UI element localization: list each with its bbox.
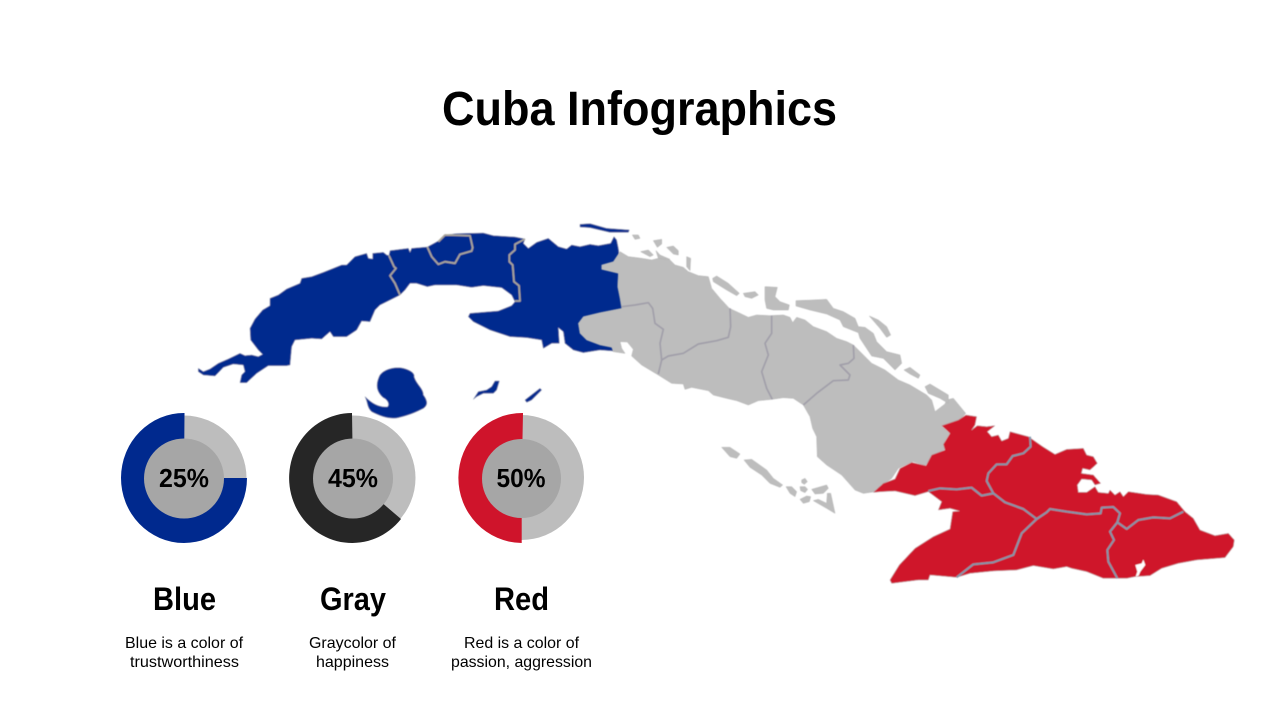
legend item: red: Red bbox=[494, 581, 549, 617]
map region: blue western provinces bbox=[198, 224, 629, 418]
map region: gray central provinces bbox=[578, 235, 966, 513]
title: Cuba Infographics bbox=[442, 83, 837, 136]
donut chart: blue 25% bbox=[121, 413, 247, 543]
legend item: red: passion, aggression bbox=[451, 654, 592, 671]
donut chart: gray 45%: 45% bbox=[328, 463, 378, 493]
map of Cuba bbox=[198, 224, 1234, 583]
donut chart: red 50% bbox=[458, 413, 584, 543]
donut chart: gray 45% bbox=[289, 413, 416, 543]
legend item: red bbox=[451, 581, 592, 671]
legend item: blue: Blue is a color of bbox=[125, 635, 244, 652]
legend item: gray: happiness bbox=[316, 654, 389, 671]
map region: red eastern provinces bbox=[873, 415, 1234, 583]
legend item: blue bbox=[125, 581, 244, 671]
donut chart: red 50%: 50% bbox=[496, 463, 546, 493]
legend item: blue: Blue bbox=[153, 581, 216, 617]
legend item: gray: Gray bbox=[320, 581, 386, 617]
donut chart: blue 25%: 25% bbox=[159, 463, 209, 493]
legend item: gray bbox=[309, 581, 397, 671]
legend item: blue: trustworthiness bbox=[130, 654, 239, 671]
legend item: red: Red is a color of bbox=[464, 635, 580, 652]
legend item: gray: Graycolor of bbox=[309, 635, 397, 652]
